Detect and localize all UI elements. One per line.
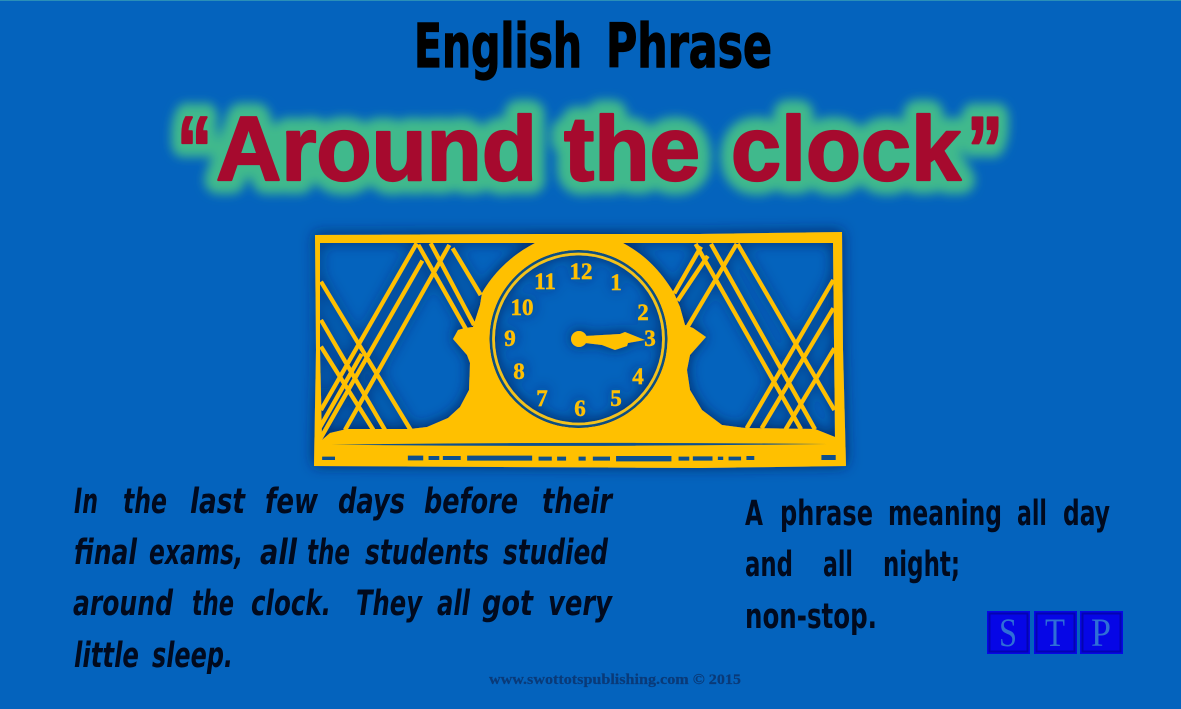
clock case with openings [314,232,846,468]
text block: example sentence: the [307,533,350,573]
text block: example sentence: few [265,482,318,522]
text block: example sentence: around [73,584,174,624]
clock numerals: 2 [637,300,649,325]
title: Around the clock with green glow: “ [177,99,212,200]
icon: yellow mantel clock [314,232,846,468]
text block: example sentence: They [356,584,424,624]
title: Around the clock with green glow: clock [731,99,961,200]
text block: example sentence: all [437,584,471,624]
clock numerals: 11 [534,269,556,294]
clock face ring [491,252,666,426]
text block: phrase meaning: and [745,545,793,585]
title: Around the clock with green glow: the [564,99,700,200]
title: Around the clock with green glow: Around [216,99,537,200]
text block: example sentence: clock. [251,584,331,624]
clock numerals: 4 [632,364,644,389]
title: Around the clock with green glow: ” [967,99,1003,200]
text block: example sentence: days [338,482,405,522]
text block: phrase meaning: all [823,545,853,585]
text block: phrase meaning: night; [883,545,960,585]
clock numerals [504,259,656,421]
text block: example sentence: sleep. [152,636,233,676]
right lattice lines [674,244,834,429]
text block: example sentence: very [548,584,614,624]
text block: phrase meaning: day [1063,494,1110,534]
clock numerals: 7 [536,386,548,411]
text block: example sentence: got [482,584,534,624]
title: Around the clock with green glow: ” [967,99,1003,200]
clock numerals: 3 [644,326,656,351]
logo: STP tiles: S [999,610,1017,655]
text block: example sentence: all [260,533,298,573]
text block: example sentence: In [74,482,98,522]
left lattice lines [320,243,481,439]
text block: example sentence: exams, [149,533,243,573]
heading: English Phrase [414,11,772,82]
text block: phrase meaning: all [1017,494,1047,534]
base slots [322,443,836,461]
text block: example sentence: last [190,482,246,522]
text block: phrase meaning: non-stop. [745,597,877,637]
title: Around the clock with green glow: “ [177,99,212,200]
logo: STP tiles [987,610,1123,655]
clock numerals: 1 [610,270,622,295]
text block: phrase meaning [745,494,1110,637]
text block: example sentence: final [74,533,138,573]
text block: example sentence: studied [503,533,609,573]
footer: website and copyright: www.swottotspublishing.com © 2015 [489,672,741,688]
clock numerals: 5 [610,386,622,411]
logo: STP tiles: T [1045,610,1065,655]
text block: example sentence: the [123,482,167,522]
text block: phrase meaning: phrase [780,494,873,534]
text block: example sentence: little [74,636,139,676]
heading: English Phrase: English [414,11,582,82]
text block: example sentence: the [192,584,234,624]
text block: example sentence: before [424,482,518,522]
text block: phrase meaning: A [745,494,763,534]
clock numerals: 12 [570,259,592,284]
clock hands [571,331,645,350]
text block: example sentence [73,482,614,676]
title: Around the clock with green glow: Around [216,99,537,200]
clock numerals: 8 [513,359,525,384]
title: Around the clock with green glow [177,99,1003,200]
clock numerals: 9 [504,326,516,351]
text block: example sentence: their [542,482,614,522]
title: Around the clock with green glow: the [564,99,700,200]
heading: English Phrase: Phrase [606,11,772,82]
text block: example sentence: students [365,533,489,573]
logo: STP tiles: P [1091,610,1111,655]
title: Around the clock with green glow: clock [731,99,961,200]
clock numerals: 10 [510,295,534,320]
text block: phrase meaning: meaning [888,494,1002,534]
clock numerals: 6 [574,396,586,421]
